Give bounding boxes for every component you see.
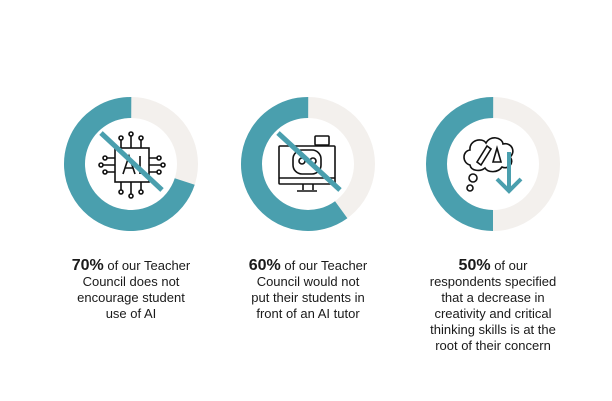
icon: AI chip — [99, 132, 165, 198]
text: stat 3 — [430, 257, 556, 353]
text: stat 3: thinking skills is at the — [430, 322, 556, 337]
text: stat 1 — [72, 257, 190, 321]
donut 3 — [436, 108, 550, 220]
text: stat 3: root of their concern — [435, 338, 551, 353]
text: stat 1: Council does not — [83, 274, 179, 289]
text: stat 3: 50% of our — [459, 257, 527, 274]
text: stat 3: that a decrease in — [441, 290, 545, 305]
icon: robot monitor — [279, 136, 335, 191]
text: stat 2: put their students in — [251, 290, 365, 305]
text: stat 2: Council would not — [257, 274, 359, 289]
text: stat 2: 60% of our Teacher — [249, 257, 367, 274]
text: stat 2: front of an AI tutor — [256, 306, 360, 321]
donut 1 — [60, 93, 202, 235]
text: stat 1: use of AI — [106, 306, 156, 321]
text: stat 2 — [249, 257, 367, 321]
icon: thought cloud with pencils — [464, 138, 513, 191]
donut 2 — [229, 85, 387, 243]
text: stat 1: encourage student — [77, 290, 185, 305]
text: stat 3: creativity and critical — [434, 306, 552, 321]
text: stat 3: respondents specified — [430, 274, 556, 289]
arrow down — [497, 152, 521, 191]
text: stat 1: 70% of our Teacher — [72, 257, 190, 274]
